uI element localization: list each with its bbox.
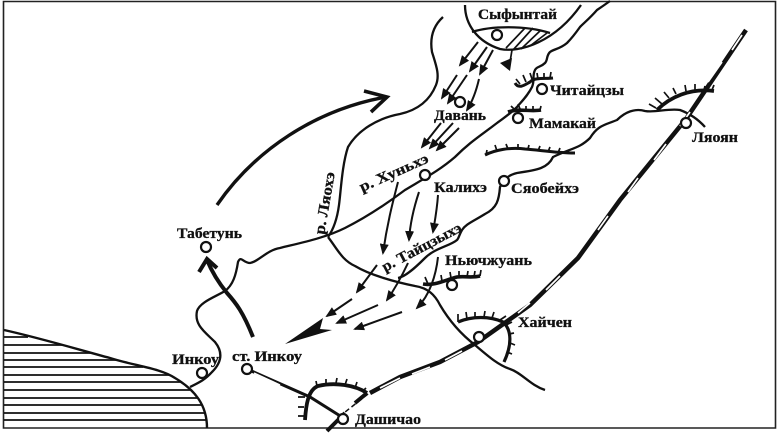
main retreat arrow — [285, 318, 332, 344]
curved arrow to Табетунь — [199, 259, 253, 337]
troop movement arrows: from Калихэ — [327, 182, 438, 329]
ridge: Мамакай — [508, 104, 541, 112]
ridge: Дашичао — [298, 378, 367, 420]
place labels: ст. Инкоу — [232, 349, 303, 365]
place labels: Сяобейхэ — [511, 181, 579, 197]
ridge: Читайцзы — [515, 72, 553, 86]
place labels: Сыфынтай — [478, 7, 557, 23]
ridge: Сяобейхэ — [485, 144, 575, 155]
place labels: Инкоу — [172, 352, 220, 368]
river labels: р. Тайцзыхэ — [379, 220, 465, 276]
place labels: Ньючжуань — [445, 253, 532, 269]
railway — [247, 30, 746, 431]
place labels — [172, 7, 738, 428]
place labels: Хайчен — [518, 315, 572, 331]
ridge: Ляоян — [649, 84, 714, 110]
fortified position: Сыфынтай — [465, 5, 581, 71]
place labels: Мамакай — [529, 116, 596, 132]
river labels: р. Хуньхэ — [357, 151, 431, 196]
river labels — [312, 151, 465, 276]
troop movement arrows: from Сыфынтай — [422, 42, 493, 150]
ridge: Ньючжуань — [423, 270, 481, 284]
place labels: Калихэ — [434, 180, 487, 196]
place labels: Ляоян — [692, 130, 738, 146]
sea with horizontal hatching — [4, 330, 207, 428]
river labels: р. Ляохэ — [312, 171, 339, 236]
ridge: Хайчен — [458, 311, 515, 362]
place labels: Читайцзы — [550, 83, 624, 99]
settlement markers — [197, 30, 691, 424]
place labels: Дашичао — [355, 412, 421, 428]
rivers — [190, 1, 705, 390]
place labels: Давань — [434, 108, 486, 124]
large curved arrow toward north — [217, 91, 387, 205]
place labels: Табетунь — [177, 226, 242, 242]
